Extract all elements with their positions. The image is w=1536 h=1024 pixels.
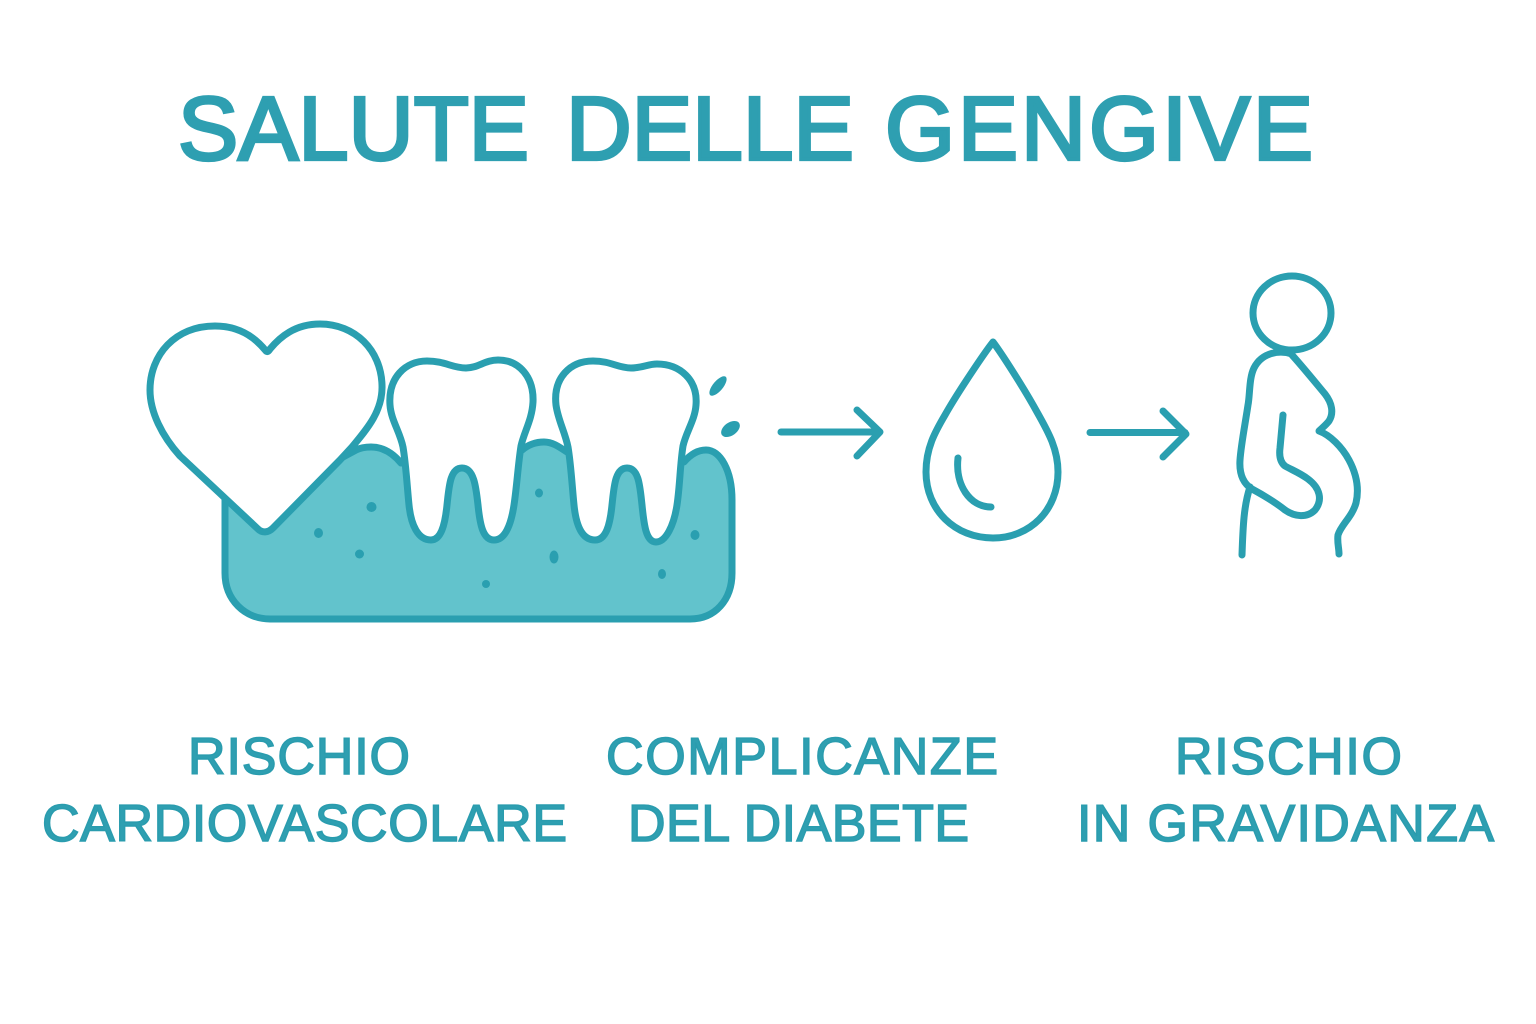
- tooth right: [556, 361, 696, 542]
- title: [178, 80, 1313, 180]
- arrow 1: [781, 410, 880, 456]
- title: SALUTE: [178, 80, 529, 180]
- icon: water drop: [926, 342, 1058, 538]
- title: GENGIVE: [885, 80, 1313, 180]
- label: cardiovascular risk: [42, 728, 567, 853]
- icon: gums with teeth and heart: [150, 324, 743, 619]
- title: DELLE: [566, 80, 854, 180]
- tooth left: [390, 360, 533, 540]
- label: pregnancy risk: IN GRAVIDANZA: [1077, 795, 1494, 853]
- gum block: [225, 442, 732, 619]
- arrow 2: [1090, 411, 1186, 457]
- heart: [150, 324, 382, 532]
- icon: pregnant woman: [1240, 276, 1357, 555]
- gum speckles: [314, 488, 700, 588]
- label: pregnancy risk: RISCHIO: [1175, 728, 1402, 786]
- label: diabetes complications: DEL DIABETE: [628, 795, 969, 853]
- label: diabetes complications: [606, 728, 998, 853]
- label: diabetes complications: COMPLICANZE: [606, 728, 998, 786]
- tartar specks: [706, 374, 743, 440]
- label: cardiovascular risk: CARDIOVASCOLARE: [42, 795, 567, 853]
- label: cardiovascular risk: RISCHIO: [188, 728, 410, 786]
- label: pregnancy risk: [1077, 728, 1494, 853]
